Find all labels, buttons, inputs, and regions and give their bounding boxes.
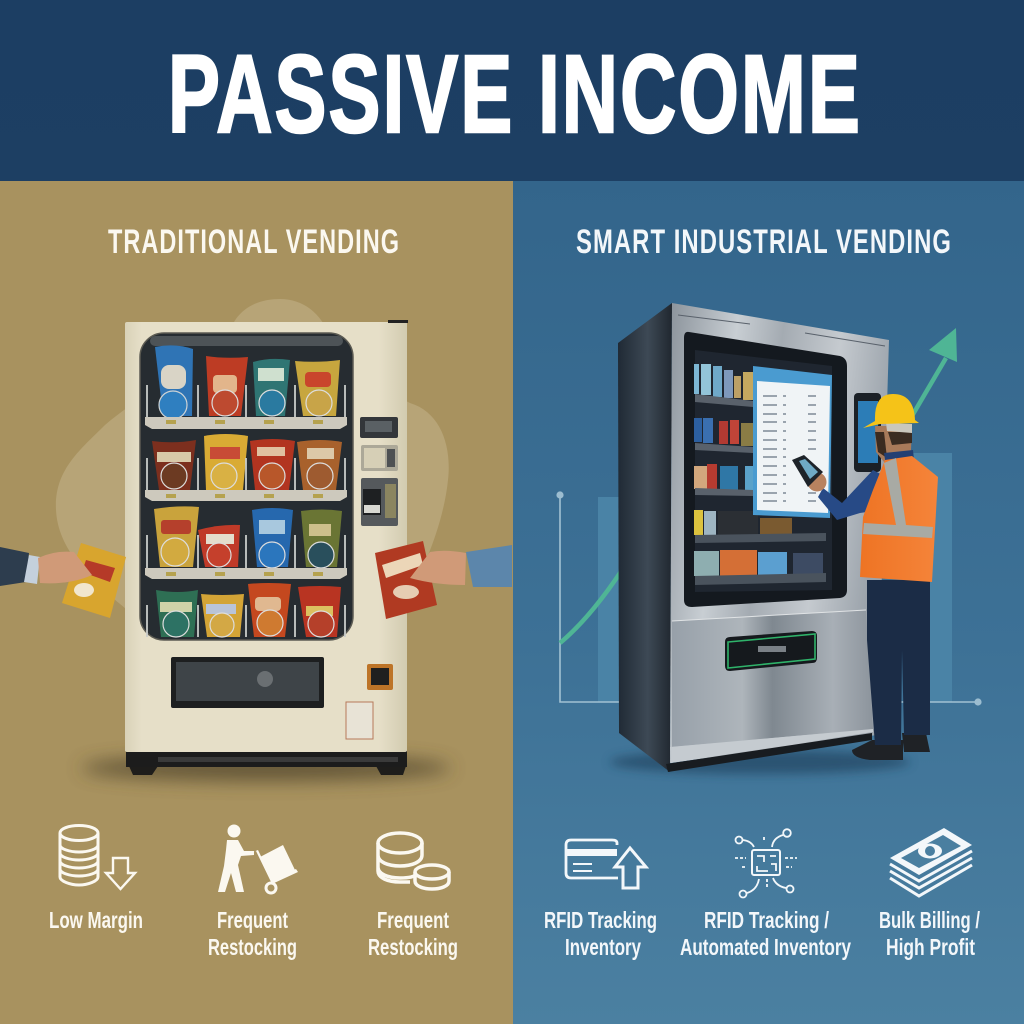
panel: traditional vending background (0, 181, 513, 1024)
machine body (125, 322, 407, 752)
shelf 3 (145, 568, 347, 579)
cuff (24, 555, 40, 584)
label: RFID Tracking (544, 907, 657, 933)
dashboard rows (763, 396, 820, 501)
coin return (367, 664, 393, 690)
side panel (618, 303, 672, 772)
icon: chip circuit (735, 829, 797, 898)
feature: bulk billing (879, 828, 980, 960)
handheld tablet (792, 455, 823, 487)
red snack bag (375, 541, 437, 619)
boots (852, 733, 930, 760)
reflective strips (863, 458, 933, 538)
traditional vending machine (125, 320, 408, 775)
bill display (360, 417, 398, 438)
label: Bulk Billing / (879, 907, 980, 933)
shelf rails (147, 385, 345, 637)
neck and head (875, 426, 912, 462)
feature: rfid tracking inventory (544, 840, 657, 960)
upper front panel (670, 303, 889, 763)
inner glass (695, 350, 832, 592)
machine base (126, 751, 407, 767)
hair (888, 432, 912, 445)
sticker (346, 702, 373, 739)
wall touchscreen (854, 393, 881, 472)
yellow bag window (74, 583, 94, 597)
label second line: Inventory (565, 934, 641, 960)
yellow bag label (82, 560, 115, 582)
icon: cash stack (890, 828, 972, 896)
label second line: High Profit (886, 934, 975, 960)
snack row 2 (152, 434, 342, 490)
product shelf row 2 (694, 418, 753, 453)
label second line: Restocking (208, 934, 297, 960)
label second line: Automated Inventory (680, 934, 851, 960)
panel: smart industrial vending background (513, 181, 1024, 1024)
left bar (598, 497, 620, 702)
top panel seam (678, 315, 885, 346)
denim sleeve (466, 545, 512, 587)
axis end dot (974, 698, 982, 706)
feature: frequent restocking coins (368, 833, 458, 960)
base vents (158, 757, 398, 762)
trousers (867, 580, 930, 745)
collection flap (171, 657, 324, 708)
icon: down arrow (106, 858, 135, 889)
red bag splash (393, 585, 419, 599)
title banner (0, 0, 1024, 181)
axis dots (556, 491, 564, 499)
machine feet (129, 766, 406, 775)
hand (808, 472, 826, 492)
lower front panel (672, 610, 873, 747)
snack row 3 (154, 506, 342, 568)
sleeve (0, 547, 29, 586)
door gap (672, 610, 866, 621)
window top highlight (150, 336, 343, 346)
icon: coins (378, 833, 449, 889)
icon: coin stack (60, 826, 98, 885)
product shelf row 1 (694, 364, 753, 407)
icon: up arrow (615, 848, 646, 888)
axes (560, 495, 978, 702)
label second line: Restocking (368, 934, 458, 960)
label: Frequent (217, 907, 288, 933)
right bar (905, 453, 952, 702)
machine shadow (610, 750, 910, 774)
shelf price tags (166, 422, 323, 574)
handheld screen (799, 459, 818, 479)
icon: card stripe (566, 849, 617, 856)
safety vest (860, 456, 938, 582)
screen bezel (684, 332, 847, 607)
dashboard sheet (757, 381, 830, 513)
label: Frequent (377, 907, 449, 933)
growth arrowhead (929, 328, 957, 362)
product shelf row 5 (694, 550, 826, 585)
shelf 2 (145, 490, 347, 501)
snack row 4 (156, 583, 341, 637)
worker (792, 394, 938, 760)
right hand holding red snack (375, 541, 512, 619)
top hinge (388, 320, 408, 323)
label: Low Margin (49, 907, 143, 933)
status panel with green light (725, 631, 817, 671)
base shadow band (666, 733, 872, 772)
red bag label (382, 553, 423, 578)
shirt collar (884, 450, 914, 466)
base trim (670, 729, 873, 763)
snack row 1 (155, 345, 340, 419)
heading: traditional vending: TRADITIONAL VENDING (108, 223, 400, 261)
hard hat (863, 394, 919, 428)
blue shirt arm (818, 470, 892, 520)
feature: low margin (49, 826, 143, 933)
feature: automated inventory (680, 829, 851, 960)
growth line (560, 570, 622, 643)
label: RFID Tracking / (704, 907, 829, 933)
yellow snack bag (62, 543, 126, 618)
decorative blob behind machine (56, 299, 449, 612)
reflective head band (886, 423, 912, 433)
coin slot panel (361, 478, 398, 526)
shelf 1 (145, 417, 347, 429)
product shelf row 4 (694, 510, 826, 543)
left hand holding yellow snack (0, 543, 126, 618)
line chart backdrop (556, 328, 982, 706)
dashboard overlay (753, 366, 832, 518)
icon: worker with hand truck (218, 824, 298, 893)
beard (875, 432, 887, 458)
smart vending machine (618, 303, 889, 772)
hand (410, 551, 466, 585)
icon: card (566, 840, 618, 878)
machine floor shadow (81, 755, 451, 781)
glass window (140, 333, 353, 640)
growth line upper (912, 358, 946, 416)
hand (38, 552, 92, 583)
note acceptor (361, 445, 398, 471)
feature: frequent restocking hand truck (208, 824, 298, 960)
product shelf row 3 (694, 464, 753, 496)
